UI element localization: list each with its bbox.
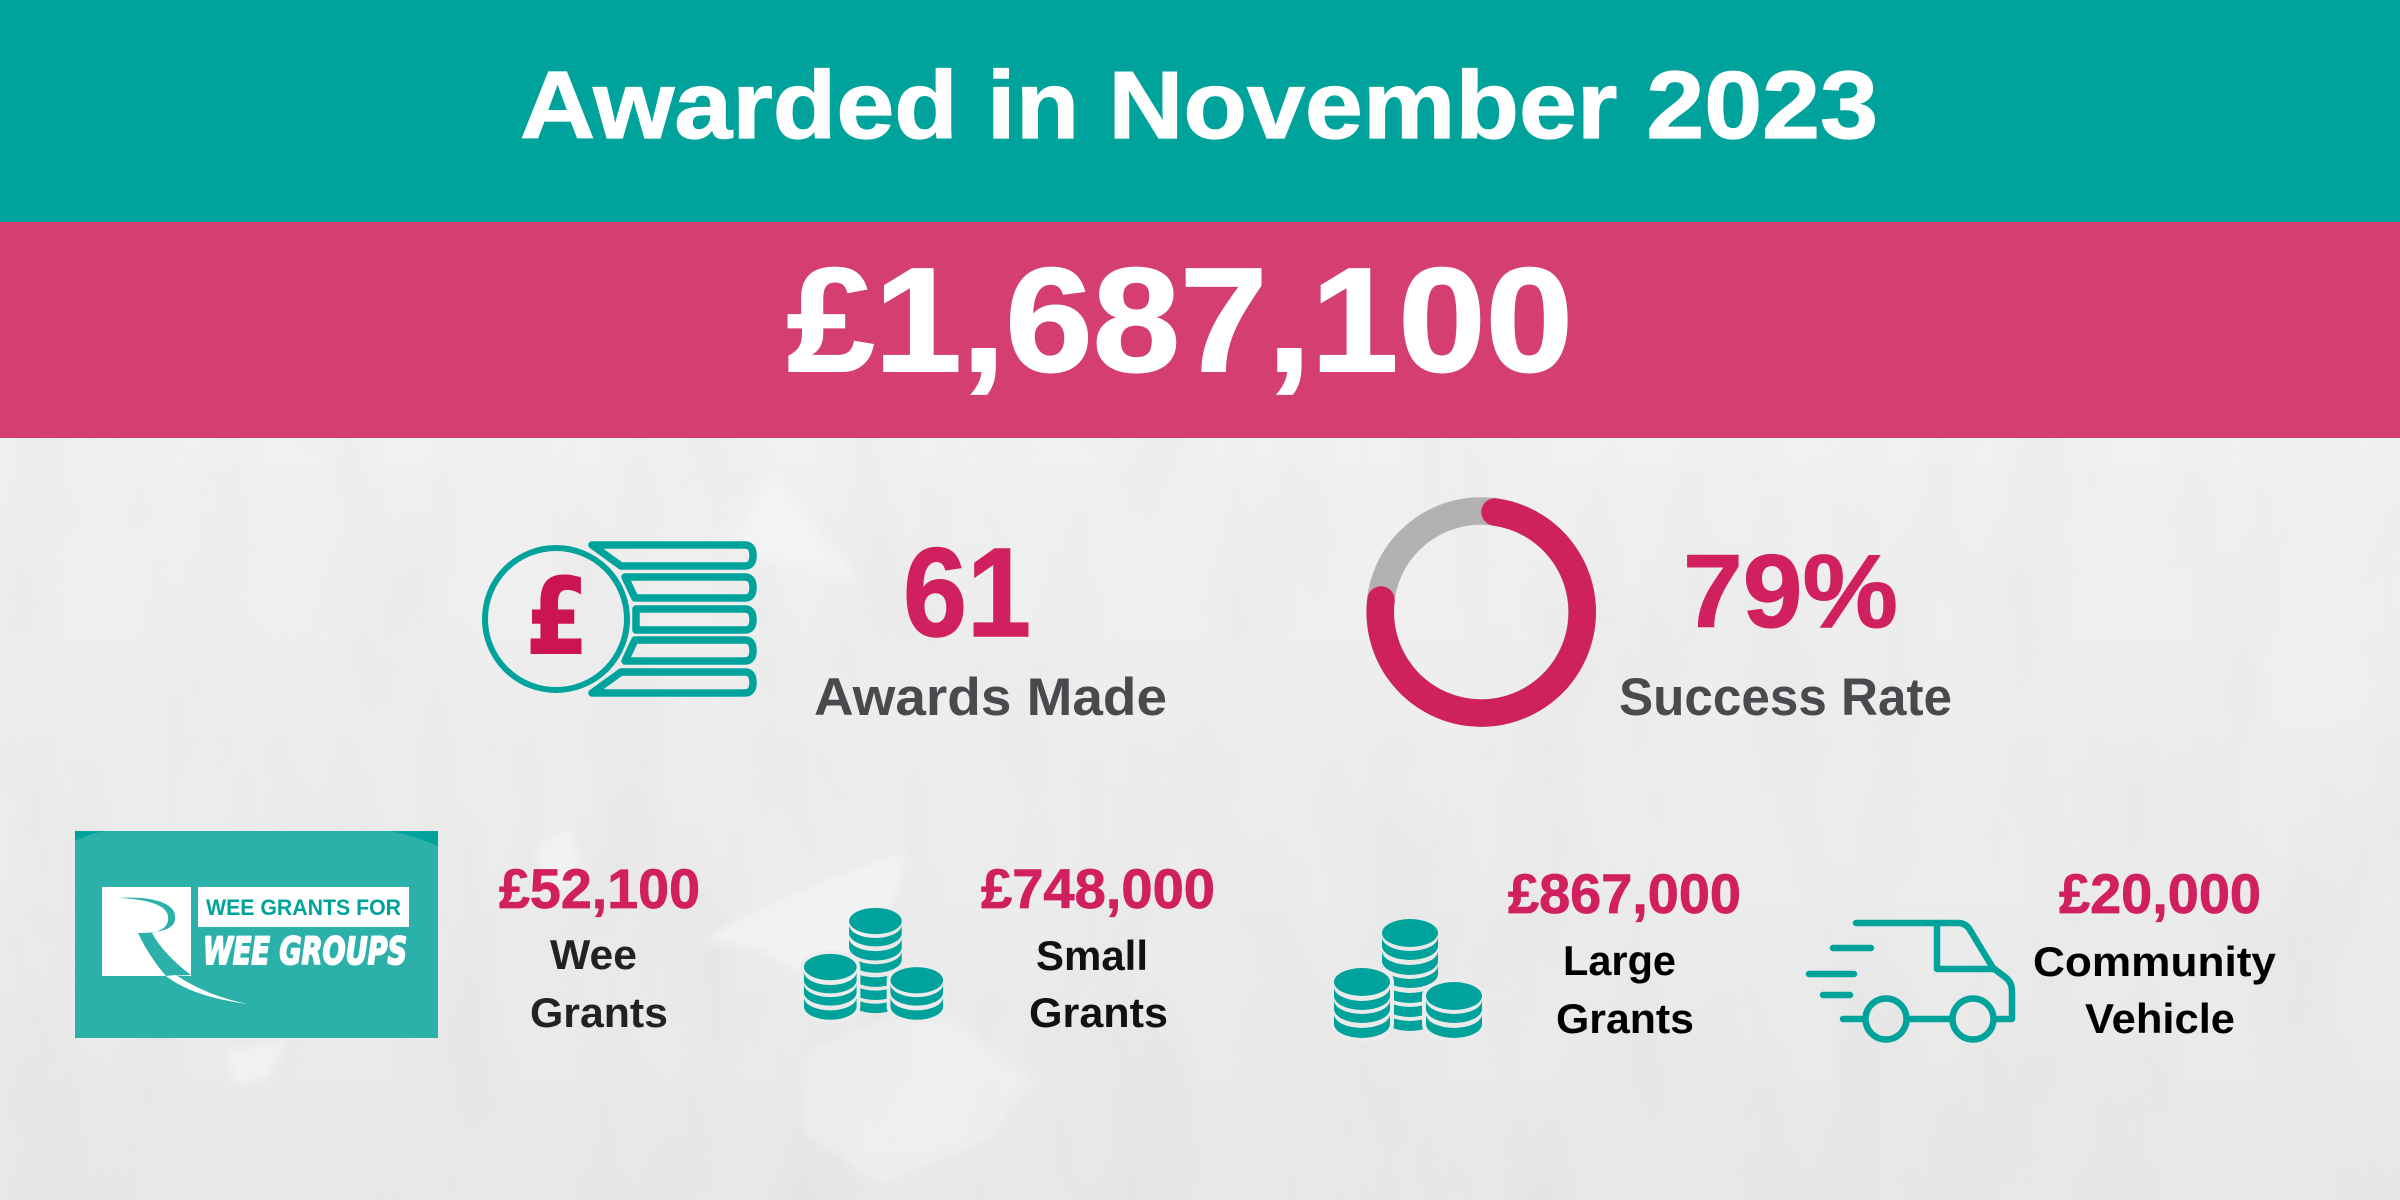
logo: wee grants for wee groups: WEE GROUPS	[203, 930, 407, 973]
paper background	[0, 438, 2400, 1200]
stat: success rate: Success Rate	[1619, 668, 1952, 727]
icon: moving van	[1809, 923, 2012, 1040]
donut chart: 79% success rate	[1380, 511, 1582, 713]
large grants figures: Large	[1563, 937, 1676, 984]
large grants figures: £867,000	[1508, 862, 1741, 925]
large grants figures: Grants	[1556, 995, 1694, 1042]
pound sign: £	[526, 556, 588, 678]
large grants figures	[1508, 862, 1741, 1042]
wee grants figures: £52,100	[499, 857, 700, 920]
total amount: £1,687,100	[787, 238, 1573, 403]
title: Awarded in November 2023	[520, 52, 1878, 159]
stat: awards made: Awards Made	[814, 668, 1167, 727]
logo: wee grants for wee groups	[75, 831, 438, 1038]
stat: awards made: 61	[903, 522, 1031, 663]
small grants figures: £748,000	[981, 857, 1215, 920]
stat: success rate: 79%	[1683, 534, 1898, 650]
small grants figures: Small	[1036, 932, 1148, 979]
wee grants figures: Wee	[550, 931, 637, 978]
community vehicle figures: £20,000	[2059, 862, 2261, 925]
community vehicle figures	[2033, 862, 2277, 1042]
icon: large grants coin stacks	[1334, 919, 1482, 1038]
header band: title	[0, 0, 2400, 222]
wee grants figures	[499, 857, 700, 1036]
small grants figures: Grants	[1029, 989, 1168, 1036]
stat: success rate	[1619, 534, 1952, 727]
wee grants figures: Grants	[530, 989, 668, 1036]
community vehicle figures: Vehicle	[2085, 995, 2235, 1042]
small grants figures	[981, 857, 1215, 1036]
stat: awards made	[814, 522, 1167, 727]
total amount band	[0, 222, 2400, 438]
icon: pound coin stack	[485, 545, 753, 693]
logo: wee grants for wee groups: WEE GRANTS FOR	[206, 895, 401, 920]
community vehicle figures: Community	[2033, 938, 2277, 985]
icon: small grants coin stacks	[804, 908, 943, 1020]
